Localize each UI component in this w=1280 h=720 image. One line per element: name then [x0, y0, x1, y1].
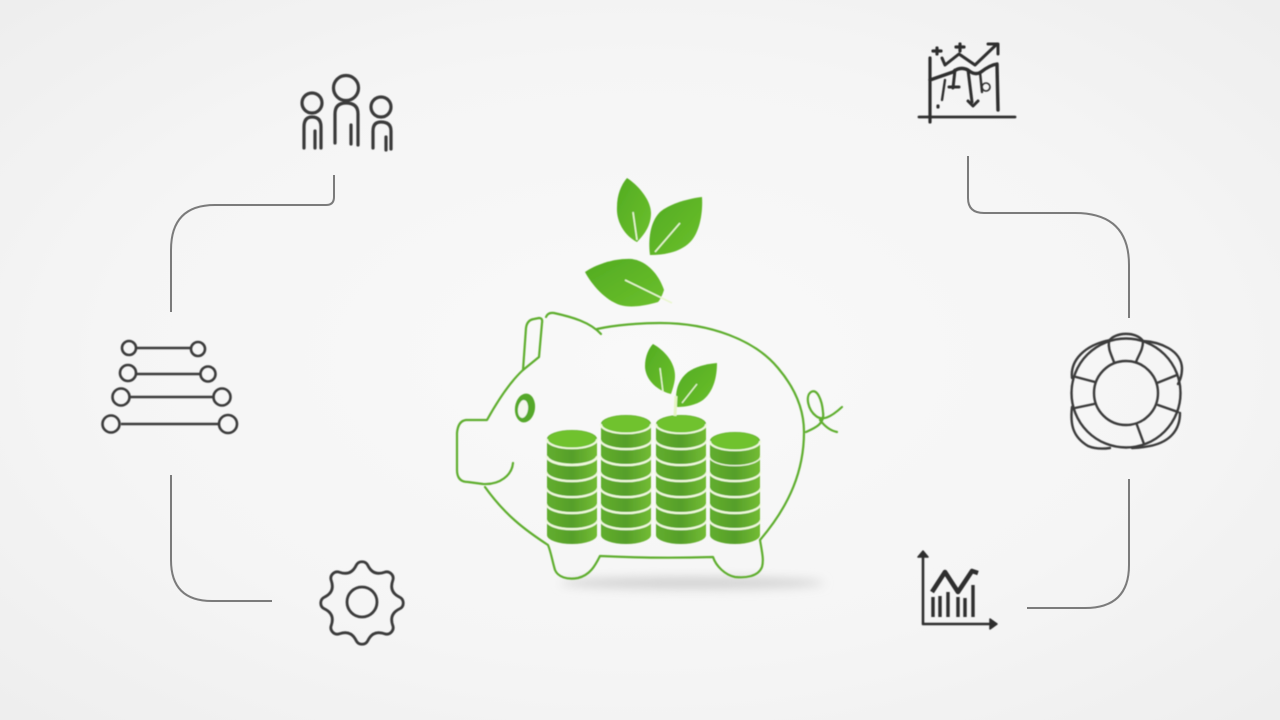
pig outline: [457, 313, 842, 579]
icon: nodes list: [102, 341, 237, 433]
leaf sprig above the pig: [585, 178, 702, 306]
pig eye: [513, 392, 537, 424]
icon: people group: [302, 76, 391, 150]
coin stacks: [547, 415, 760, 544]
coin stack 2: [601, 415, 651, 544]
connector: lifebuoy to bottom chart: [1027, 479, 1129, 608]
icon: top analytics chart: [919, 44, 1015, 122]
coin stack 4: [710, 432, 760, 544]
coin stack 1: [547, 430, 597, 544]
coin stack 3: [656, 415, 706, 544]
leaf: upper right: [649, 197, 702, 255]
icon: lifebuoy: [1071, 334, 1182, 449]
connector: nodes to gear: [171, 475, 272, 601]
illustration: piggy bank: [457, 178, 842, 579]
pig tail: [806, 391, 842, 432]
connector: top chart to lifebuoy: [968, 156, 1129, 318]
sprout inside pig: [645, 344, 717, 416]
icon: bottom bar and line chart: [918, 551, 997, 629]
leaf: lower: [585, 259, 672, 306]
leaf: upper left: [617, 178, 651, 242]
icon: gear: [321, 562, 403, 644]
connector: people to nodes: [171, 175, 334, 312]
floor shadow: [560, 577, 824, 589]
